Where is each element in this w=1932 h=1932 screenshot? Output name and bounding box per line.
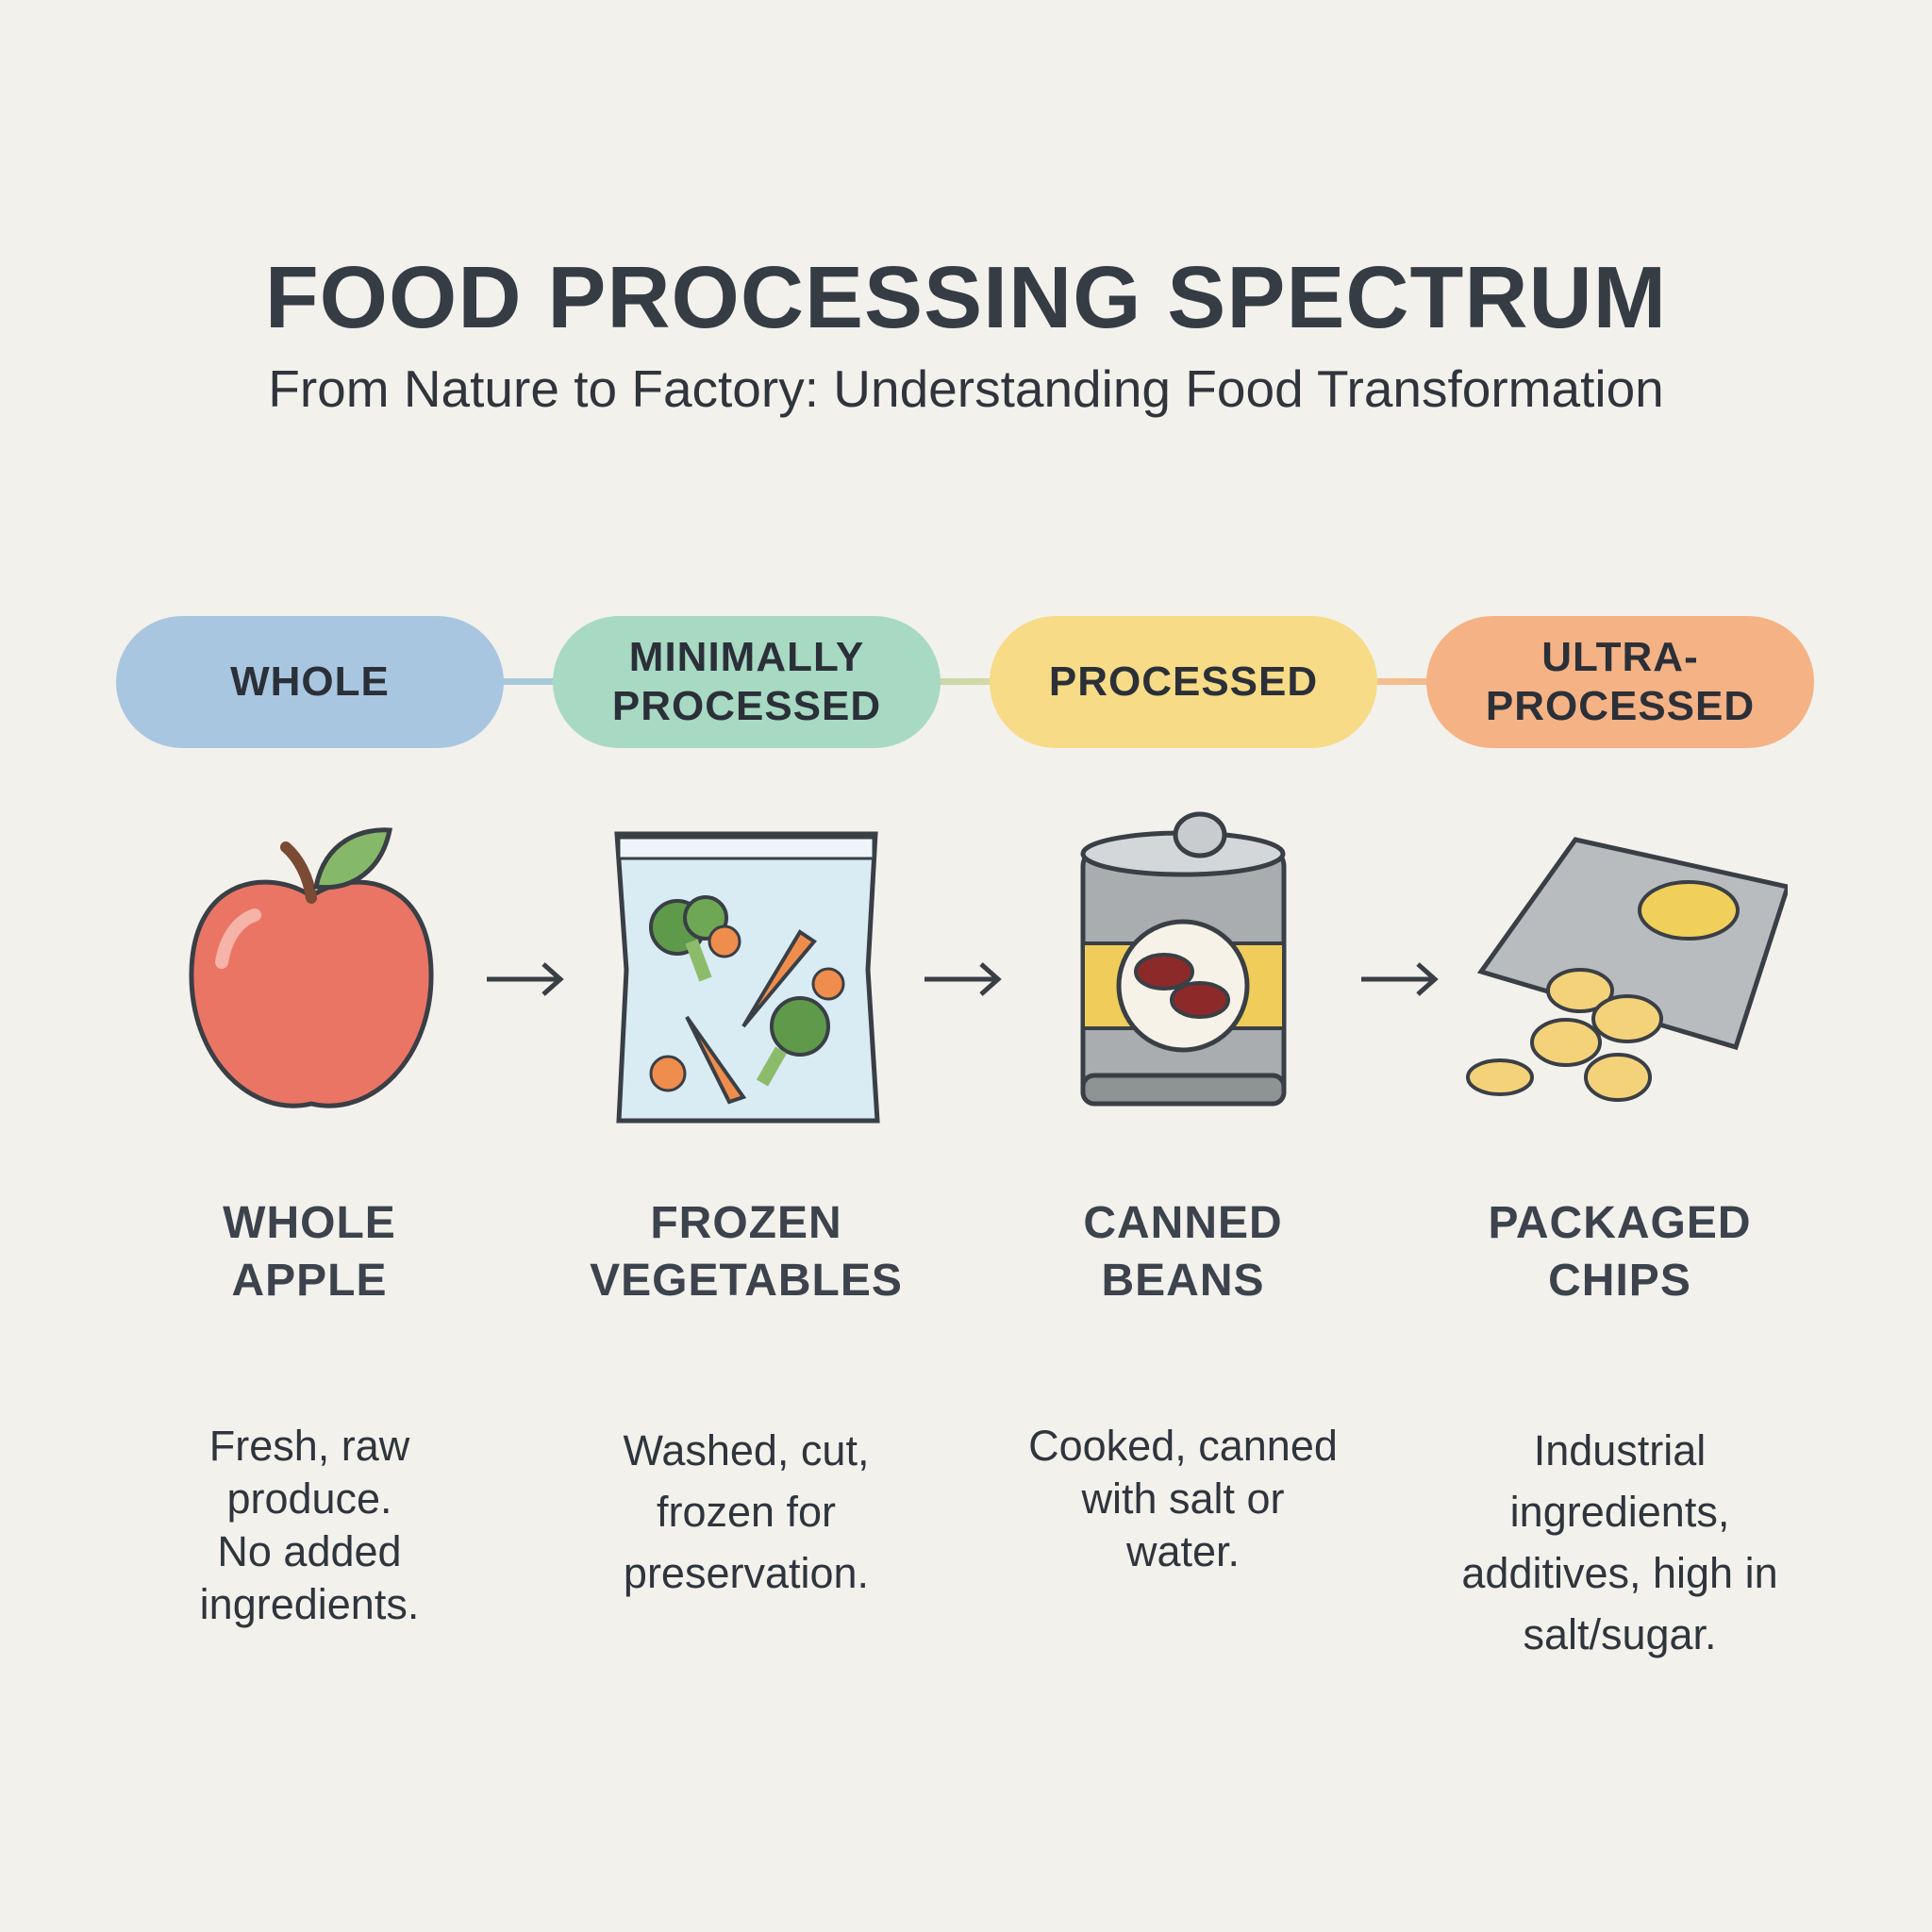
desc: processed [1028, 1422, 1338, 1575]
desc: whole [200, 1422, 419, 1628]
desc: ultra: salt/sugar. [1523, 1610, 1717, 1658]
connector lines [491, 678, 1443, 685]
desc: ultra: Industrial [1534, 1426, 1706, 1474]
label: canned beans [1083, 1198, 1283, 1306]
icon: frozen vegetables bag [614, 832, 880, 1123]
desc: ultra [1461, 1426, 1778, 1658]
desc: ultra: additives, high in [1461, 1549, 1778, 1597]
desc: whole: No added [217, 1527, 402, 1575]
desc: minimally: frozen for [657, 1488, 836, 1536]
label: canned beans: BEANS [1101, 1256, 1265, 1306]
pill: minimally processed: PROCESSED [612, 683, 881, 729]
pill: processed [990, 616, 1377, 748]
pill: ultra-processed: ULTRA- [1541, 634, 1699, 680]
desc: whole: ingredients. [200, 1580, 419, 1628]
pill: ultra-processed [1426, 616, 1814, 748]
arrow 2 [924, 962, 1002, 996]
arrow 3 [1361, 962, 1439, 996]
label: canned beans: CANNED [1083, 1198, 1283, 1248]
desc: minimally: preservation. [624, 1549, 869, 1597]
pill: minimally processed [553, 616, 941, 748]
pill: ultra-processed: PROCESSED [1486, 683, 1755, 729]
label: frozen vegetables: VEGETABLES [590, 1256, 903, 1306]
label: packaged chips: PACKAGED [1488, 1198, 1752, 1248]
icon: apple [189, 827, 434, 1108]
desc: whole: Fresh, raw [209, 1422, 409, 1470]
desc: whole: produce. [226, 1474, 392, 1523]
desc: processed: with salt or [1081, 1474, 1285, 1523]
title: FOOD PROCESSING SPECTRUM [265, 248, 1667, 346]
label: whole apple [223, 1198, 396, 1306]
label: whole apple: WHOLE [223, 1198, 396, 1248]
pill: whole: WHOLE [230, 658, 390, 705]
desc: ultra: ingredients, [1510, 1488, 1729, 1536]
label: frozen vegetables: FROZEN [650, 1198, 842, 1248]
label: packaged chips: CHIPS [1548, 1256, 1691, 1306]
desc: minimally: Washed, cut, [624, 1426, 869, 1474]
label: frozen vegetables [590, 1198, 903, 1306]
desc: minimally [623, 1426, 869, 1597]
label: packaged chips [1488, 1198, 1752, 1306]
desc: processed: water. [1126, 1527, 1240, 1575]
label: whole apple: APPLE [231, 1256, 388, 1306]
subtitle: From Nature to Factory: Understanding Food Transformation [268, 359, 1664, 418]
icon: chip bag [1466, 837, 1788, 1102]
pill: processed: PROCESSED [1049, 658, 1318, 705]
desc: processed: Cooked, canned [1028, 1422, 1338, 1470]
arrow 1 [487, 962, 564, 996]
pill: minimally processed: MINIMALLY [629, 634, 864, 680]
pill: whole [116, 616, 504, 748]
icon: canned beans [1081, 811, 1287, 1106]
